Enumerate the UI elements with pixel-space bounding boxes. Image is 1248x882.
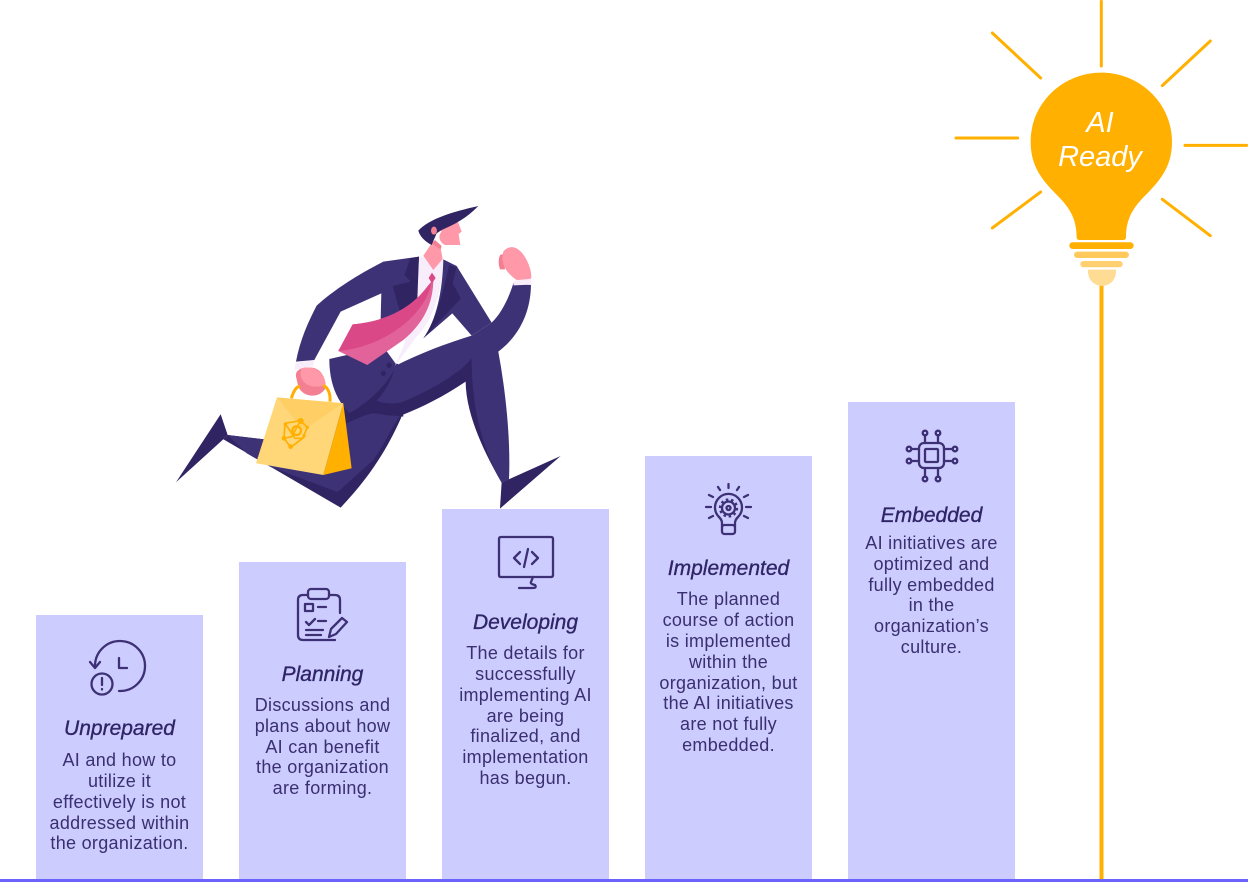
baseline (0, 879, 1248, 882)
text: Developing description: has begun. (479, 768, 572, 788)
tie knot (429, 273, 436, 283)
back hand (295, 360, 326, 396)
icon: clipboard with pencil (298, 589, 347, 640)
text: Unprepared description: addressed within (50, 813, 189, 833)
text: Embedded description: fully embedded (868, 575, 995, 595)
heading: Embedded: Embedded (881, 504, 984, 527)
tie shade (338, 282, 432, 351)
back foot (176, 414, 228, 482)
icon: clock with alert (90, 641, 145, 694)
back leg light (228, 412, 400, 492)
front leg light (377, 323, 509, 483)
front foot (500, 456, 561, 509)
panel: Implemented (645, 456, 812, 880)
text: Unprepared description: utilize it (88, 771, 151, 791)
icon: AI Ready light bulb (956, 1, 1247, 286)
torso (329, 347, 397, 413)
text: Implemented description: are not fully (680, 714, 777, 734)
bulb base (1069, 242, 1134, 286)
icon: monitor with code (499, 537, 553, 588)
text: Implemented description: within the (688, 652, 768, 672)
heading: Developing: Developing (473, 611, 578, 634)
text: Planning description: Discussions and (255, 695, 390, 715)
neck (423, 243, 443, 270)
heading: Unprepared: Unprepared (64, 717, 176, 740)
text: Implemented description: embedded. (682, 735, 775, 755)
right jacket (423, 259, 492, 338)
text: Embedded description: culture. (901, 637, 962, 657)
text: Embedded description: organization’s (874, 616, 989, 636)
panel: Unprepared (36, 615, 203, 880)
text: Planning description: AI can benefit (265, 737, 380, 757)
ear (431, 227, 437, 235)
text: Embedded description: in the (909, 595, 954, 615)
text: Implemented description: the AI initiatives (663, 693, 794, 713)
shirt (395, 257, 443, 366)
text: Implemented description: is implemented (666, 631, 791, 651)
text: Developing description: are being (487, 706, 564, 726)
light bulb pole (1100, 284, 1104, 879)
rays (956, 1, 1247, 236)
text: Planning description: are forming. (273, 778, 372, 798)
text: Unprepared description: the organization. (50, 833, 189, 853)
bulb label: Ready (1058, 141, 1143, 173)
text: Implemented description: organization, but (659, 673, 798, 693)
text: Unprepared description: effectively is not (53, 792, 186, 812)
illustration: running businessman (176, 206, 561, 509)
hip shadow (347, 363, 403, 420)
text: Developing description: implementing AI (459, 685, 592, 705)
text: Developing description: finalized, and (470, 726, 581, 746)
text: Implemented description: course of action (663, 610, 794, 630)
bulb glass (1031, 73, 1172, 240)
panel: Planning (239, 562, 406, 880)
text: Planning description: the organization (256, 757, 389, 777)
text: Embedded description: optimized and (874, 554, 989, 574)
hair (418, 206, 478, 245)
chin shadow (432, 240, 442, 249)
heading: Implemented: Implemented (668, 557, 791, 580)
briefcase handle (291, 385, 330, 402)
icon: light bulb with gear (706, 484, 751, 534)
jacket lapel shade (393, 257, 461, 338)
heading: Planning: Planning (282, 663, 364, 686)
text: Planning description: plans about how (255, 716, 391, 736)
text: Embedded description: AI initiatives are (865, 533, 998, 553)
bulb label: AI (1084, 107, 1114, 139)
front fist (499, 247, 531, 285)
briefcase logo (282, 418, 309, 449)
briefcase (256, 397, 352, 475)
face (437, 218, 462, 245)
panel: Developing (442, 509, 609, 880)
text: Developing description: implementation (462, 747, 589, 767)
jacket buttons (381, 363, 392, 376)
front leg dark (367, 358, 509, 483)
text: Unprepared description: AI and how to (63, 750, 176, 770)
back leg dark (223, 403, 402, 508)
panel: Embedded (848, 402, 1015, 880)
back arm (296, 257, 419, 362)
icon: microchip (907, 431, 957, 481)
tie (338, 279, 433, 365)
text: Developing description: The details for (466, 643, 585, 663)
text: Implemented description: The planned (677, 589, 780, 609)
text: Developing description: successfully (475, 664, 576, 684)
front forearm (487, 283, 531, 352)
